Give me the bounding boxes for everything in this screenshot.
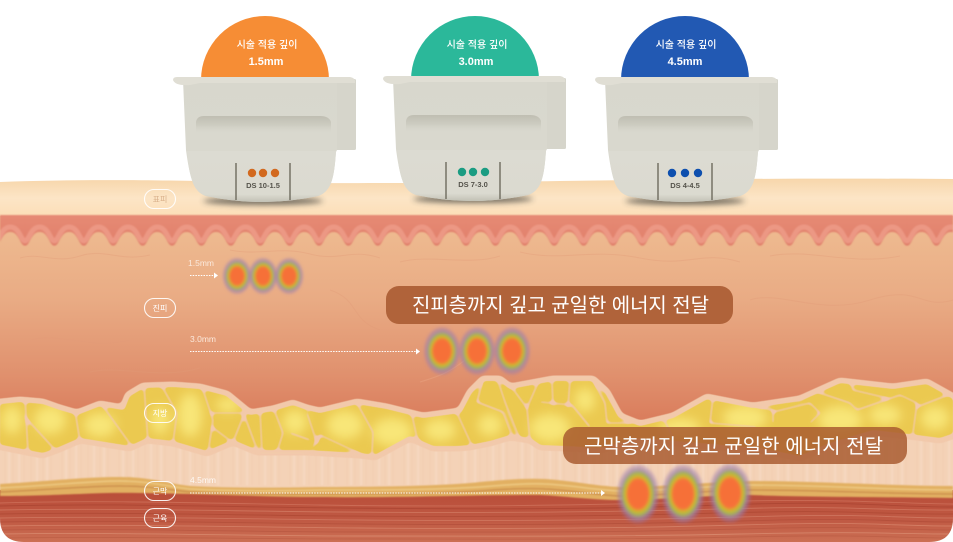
cartridge body 1.5mm xyxy=(173,77,356,202)
label: muscle xyxy=(144,508,176,528)
epidermal ridges xyxy=(0,215,953,249)
label: muscle: 근육 xyxy=(153,513,167,524)
cartridge body 3.0mm: DS 7-3.0 xyxy=(458,180,488,189)
muscle layer xyxy=(0,490,953,542)
callout: dermis energy delivery: 진피층까지 깊고 균일한 에너지 전달 xyxy=(412,289,709,318)
depth marker 1.5mm: 1.5mm xyxy=(188,258,214,268)
depth badge 4.5mm: 시술 적용 깊이 xyxy=(656,36,716,51)
label: fascia: 근막 xyxy=(153,486,168,497)
depth marker 3.0mm xyxy=(190,334,420,354)
label: fat xyxy=(144,404,176,422)
depth badge 4.5mm xyxy=(621,16,749,80)
layer labels xyxy=(144,190,176,528)
label: dermis: 진피 xyxy=(153,303,167,314)
depth badge 3.0mm xyxy=(411,16,539,80)
callout: fascia energy delivery xyxy=(563,427,907,464)
depth badge 1.5mm xyxy=(201,16,329,80)
heat spots 4.5mm xyxy=(616,462,752,525)
label: fat: 지방 xyxy=(153,408,168,419)
depth badge 4.5mm: 4.5mm xyxy=(668,56,703,68)
depth marker 4.5mm xyxy=(190,475,605,496)
heat spots 1.5mm xyxy=(222,257,304,295)
fascia layer xyxy=(0,477,953,500)
label: epidermis: 표피 xyxy=(153,194,167,205)
depth badge 1.5mm: 1.5mm xyxy=(249,56,284,68)
cartridge: 4.5mm xyxy=(595,16,778,202)
cartridge shadows xyxy=(203,195,745,205)
callout: fascia energy delivery: 근막층까지 깊고 균일한 에너지 전달 xyxy=(584,430,883,459)
callout: dermis energy delivery xyxy=(386,286,733,324)
fat cells xyxy=(0,380,953,456)
panel: skin cross-section xyxy=(0,179,953,542)
epidermis layer xyxy=(0,178,953,216)
cartridge body 4.5mm: DS 4-4.5 xyxy=(670,181,700,190)
fat layer xyxy=(0,375,953,460)
cartridge body 1.5mm: DS 10-1.5 xyxy=(246,181,280,190)
cartridge body 4.5mm xyxy=(595,77,778,202)
connective tissue xyxy=(0,420,953,490)
depth marker 4.5mm: 4.5mm xyxy=(190,475,216,485)
depth marker 1.5mm xyxy=(188,258,218,278)
cartridge: 1.5mm xyxy=(173,16,356,202)
cartridge body 3.0mm xyxy=(383,76,566,201)
label: fascia xyxy=(144,482,176,500)
fat outline xyxy=(0,379,953,458)
label: epidermis xyxy=(144,190,176,208)
dermis layer xyxy=(0,216,953,426)
dermis fibres xyxy=(20,250,953,382)
cartridge: 3.0mm xyxy=(383,16,566,201)
depth badge 3.0mm: 3.0mm xyxy=(459,56,494,68)
heat spots 3.0mm xyxy=(423,326,531,376)
depth badge 1.5mm: 시술 적용 깊이 xyxy=(237,36,297,51)
depth marker 3.0mm: 3.0mm xyxy=(190,334,216,344)
depth badge 3.0mm: 시술 적용 깊이 xyxy=(447,36,507,51)
label: dermis xyxy=(144,298,176,318)
